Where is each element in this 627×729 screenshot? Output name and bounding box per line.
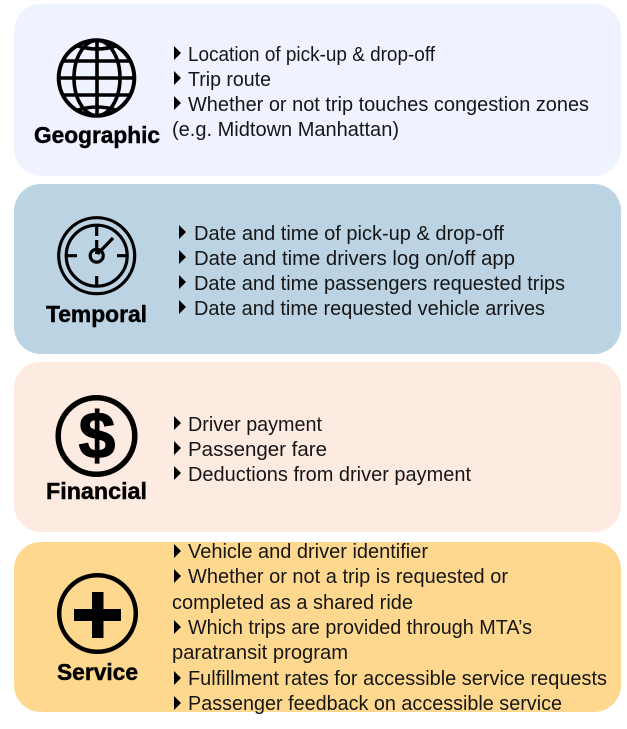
icon: plus [59, 575, 136, 652]
panel: temporal [14, 184, 621, 354]
heading: Financial: Financial [46, 478, 147, 504]
icon: clock [59, 218, 135, 294]
heading: Geographic: Geographic [34, 122, 160, 148]
bullet list: financial: Passenger fare [188, 438, 327, 461]
icon: globe [59, 40, 134, 116]
bullet list: temporal: Date and time drivers log on/off app [194, 247, 515, 270]
bullet list: geographic: Whether or not trip touches congestion zones [188, 93, 589, 116]
heading: Temporal: Temporal [46, 301, 147, 327]
bullet list: service: completed as a shared ride [172, 591, 413, 614]
bullet list: financial: Driver payment [188, 413, 322, 436]
panel: geographic [14, 4, 621, 176]
bullet list: service: Passenger feedback on accessible service [188, 692, 562, 715]
bullet list: service [172, 540, 607, 715]
icon: dollar: $ [79, 398, 115, 472]
icon: dollar [58, 398, 135, 474]
bullet list: geographic: Location of pick-up & drop-off [188, 43, 435, 66]
heading: Service: Service [57, 659, 138, 685]
bullet list: financial: Deductions from driver payment [188, 463, 471, 486]
bullet list: geographic: Trip route [188, 68, 271, 91]
bullet list: geographic: (e.g. Midtown Manhattan) [172, 118, 399, 141]
bullet list: service: Whether or not a trip is requested or [188, 565, 508, 588]
panel: service [14, 540, 621, 715]
bullet list: service: Fulfillment rates for accessible service requests [188, 667, 607, 690]
panel: financial [14, 362, 621, 532]
bullet list: temporal [179, 222, 565, 320]
bullet list: financial [174, 413, 471, 486]
bullet list: temporal: Date and time requested vehicle arrives [194, 297, 545, 320]
bullet list: geographic [172, 43, 589, 141]
bullet list: temporal: Date and time passengers requested trips [194, 272, 565, 295]
bullet list: service: Which trips are provided through MTA’s [188, 616, 532, 639]
bullet list: temporal: Date and time of pick-up & drop-off [194, 222, 504, 245]
bullet list: service: paratransit program [172, 641, 348, 664]
bullet list: service: Vehicle and driver identifier [188, 540, 428, 563]
